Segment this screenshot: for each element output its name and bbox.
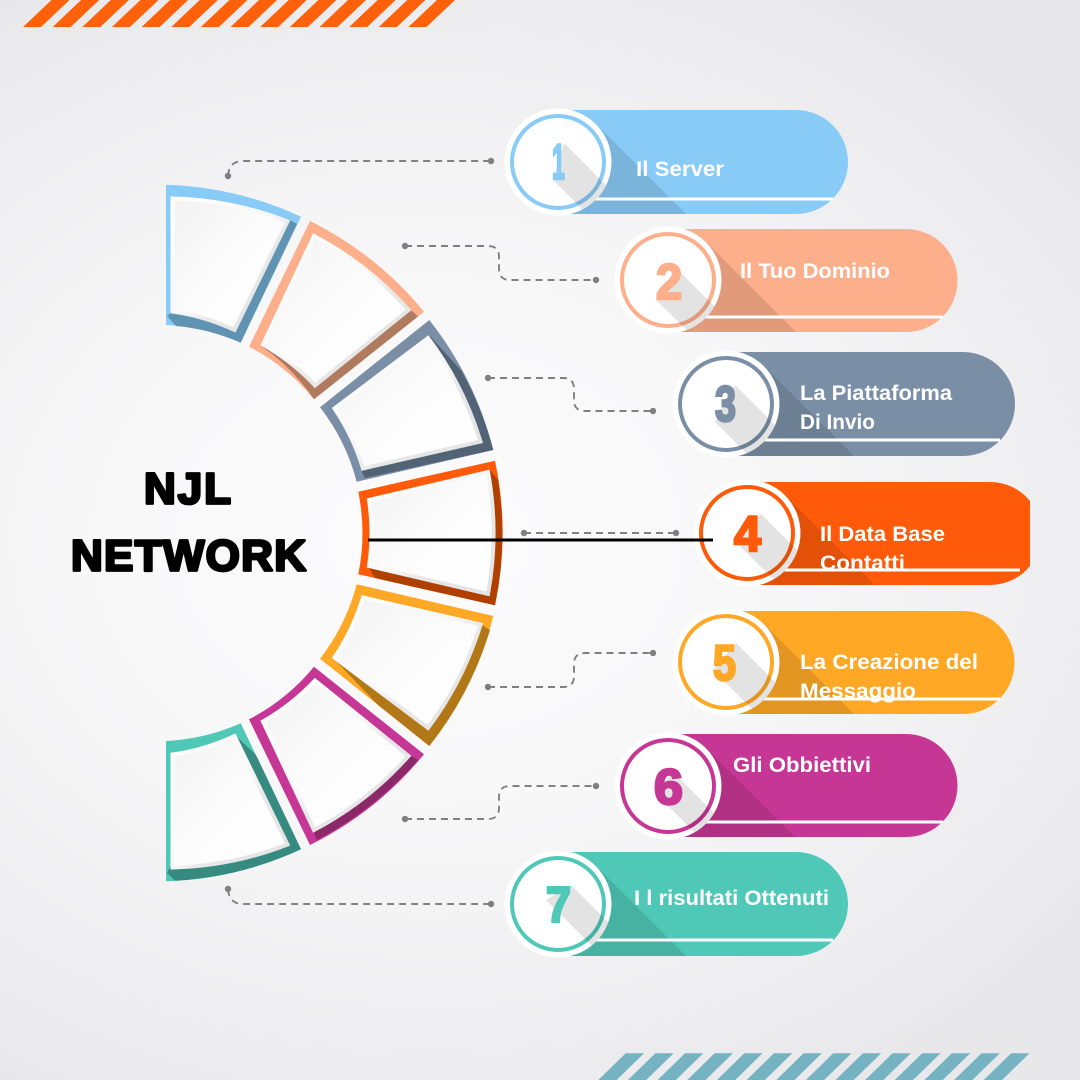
segment 5	[320, 584, 493, 746]
segment 4	[358, 461, 503, 605]
pill 4: Il Data Base Contatti	[699, 482, 1030, 585]
connector 4	[521, 530, 679, 536]
pill 3: La Piattaforma Di Invio	[678, 350, 1015, 456]
pill 3: La Piattaforma Di Invio: La Piattaforma	[800, 382, 952, 405]
pill 3: La Piattaforma Di Invio: Di Invio	[800, 411, 875, 434]
connector 5	[485, 650, 656, 690]
black connector line to pill 4	[368, 538, 713, 542]
pill 5: La Creazione del Messaggio: 5	[713, 635, 736, 691]
connector 3	[485, 375, 656, 414]
pill 7: I l risultati Ottenuti: 7	[546, 877, 571, 933]
decorative stripes: bottom teal	[598, 1053, 1029, 1080]
pill 7: I l risultati Ottenuti: I l risultati Ottenuti	[634, 887, 829, 910]
pill 5: La Creazione del Messaggio: La Creazione del	[800, 651, 978, 674]
pill 4: Il Data Base Contatti: Il Data Base	[820, 523, 945, 546]
pill 6: Gli Obbiettivi: 6	[654, 759, 683, 815]
connector 7	[225, 886, 494, 907]
pill 5: La Creazione del Messaggio: Messaggio	[800, 680, 916, 703]
semicircle diagram	[166, 185, 503, 881]
pill 6: Gli Obbiettivi	[616, 734, 958, 840]
pill 2: Il Tuo Dominio	[614, 226, 958, 332]
segment 3	[320, 320, 493, 482]
pill 2: Il Tuo Dominio: 2	[656, 254, 682, 310]
connector 6	[402, 783, 599, 822]
pill 5: La Creazione del Messaggio	[678, 611, 1014, 716]
pill 1: Il Server	[504, 108, 848, 216]
pill 1: Il Server: 1	[552, 134, 565, 190]
pill 6: Gli Obbiettivi: Gli Obbiettivi	[733, 754, 871, 777]
connector 1	[225, 158, 494, 179]
title: NJL Network	[71, 464, 306, 580]
pill 2: Il Tuo Dominio: Il Tuo Dominio	[740, 260, 890, 283]
pill 4: Il Data Base Contatti: 4	[734, 506, 761, 562]
title: NJL Network: NETWORK	[71, 532, 306, 580]
segment 6	[249, 667, 424, 845]
segment 1	[166, 185, 301, 343]
pill 7: I l risultati Ottenuti	[504, 850, 848, 958]
segment 2	[249, 221, 424, 399]
decorative stripes: top orange	[23, 0, 455, 27]
pill 3: La Piattaforma Di Invio: 3	[715, 376, 736, 432]
title: NJL Network: NJL	[144, 464, 231, 514]
pill 4: Il Data Base Contatti: Contatti	[820, 552, 905, 575]
pill 1: Il Server: Il Server	[636, 158, 724, 181]
connector 2	[402, 243, 599, 283]
segment 7	[166, 723, 301, 881]
